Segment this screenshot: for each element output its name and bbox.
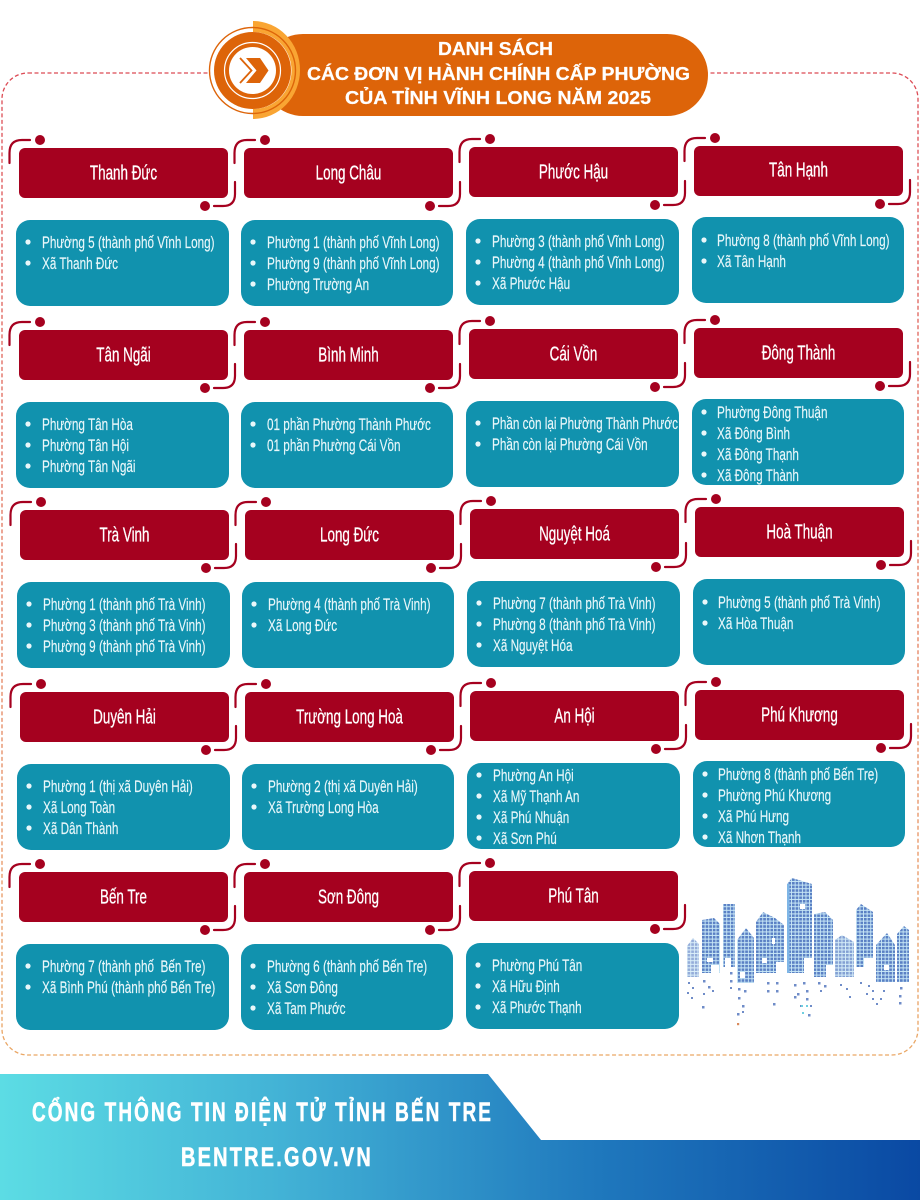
list: Phường 1 (thị xã Duyên Hải) (43, 778, 193, 797)
list (242, 582, 454, 668)
list: Phường 9 (thành phố Vĩnh Long) (267, 255, 440, 274)
list (466, 219, 679, 305)
header: Trà Vinh (100, 523, 149, 546)
footer text (32, 1095, 493, 1172)
title pill (262, 34, 708, 116)
list: Phường Phú Tân (492, 957, 582, 976)
list (241, 944, 453, 1030)
list: Xã Tam Phước (267, 1000, 346, 1019)
list: Xã Phú Nhuận (493, 809, 569, 828)
list (692, 399, 904, 486)
card: Sơn Đông (234, 859, 460, 1030)
header (695, 690, 904, 740)
list: Xã Hữu Định (492, 978, 560, 997)
title banner (210, 21, 708, 119)
list: Phần còn lại Phường Thành Phước (492, 415, 678, 434)
header: Phú Tân (548, 884, 599, 907)
card: Phước Hậu (460, 134, 685, 305)
header: Bến Tre (100, 885, 147, 908)
card: Tân Ngãi (10, 317, 235, 488)
card: Bình Minh (234, 317, 460, 488)
list: Phường Tân Hòa (42, 416, 134, 435)
list: Xã Mỹ Thạnh An (493, 788, 579, 807)
list (16, 220, 229, 306)
list (17, 582, 230, 668)
list: Xã Phú Hưng (718, 808, 789, 827)
list: Phường Tân Hội (42, 437, 129, 456)
list (466, 401, 679, 487)
list: Xã Sơn Phú (493, 830, 557, 849)
list (692, 217, 904, 303)
list: Xã Hòa Thuận (718, 615, 793, 634)
card: Phú Khương (686, 677, 911, 848)
list: Phường 5 (thành phố Trà Vinh) (718, 594, 881, 613)
list: Xã Long Đức (268, 617, 337, 636)
header (19, 330, 228, 380)
title text (307, 38, 690, 108)
card: Nguyệt Hoá (460, 496, 686, 667)
card: Long Đức (236, 497, 461, 668)
list (241, 220, 453, 306)
list: Phường Đông Thuận (717, 404, 827, 423)
header (244, 330, 453, 380)
header (244, 148, 453, 198)
list: Xã Nguyệt Hóa (493, 637, 573, 656)
footer text: BENTRE.GOV.VN (181, 1142, 373, 1172)
list: Xã Thanh Đức (42, 255, 118, 274)
list: Phường Tân Ngãi (42, 458, 136, 477)
header (469, 147, 678, 197)
list (467, 763, 680, 849)
header: Hoà Thuận (766, 520, 833, 543)
list: 01 phần Phường Thành Phước (267, 416, 431, 435)
list: Phường 7 (thành phố Trà Vinh) (493, 595, 656, 614)
list: Phường 3 (thành phố Vĩnh Long) (492, 233, 665, 252)
header: Phước Hậu (539, 160, 608, 183)
header (20, 510, 229, 560)
icon: chevron badge (210, 21, 300, 119)
header (695, 507, 904, 557)
header: Long Đức (320, 523, 379, 546)
header (244, 872, 453, 922)
list: Xã Đông Thành (717, 467, 799, 486)
list: Xã Tân Hạnh (717, 253, 786, 272)
header (19, 148, 228, 198)
card: Duyên Hải (10, 679, 236, 850)
list: Phường 8 (thành phố Vĩnh Long) (717, 232, 890, 251)
list: Phường Phú Khương (718, 787, 831, 806)
card: Phú Tân (460, 858, 685, 1029)
list (693, 579, 905, 665)
illustration: pixel city skyline (687, 878, 909, 1025)
list: Phường 8 (thành phố Trà Vinh) (493, 616, 656, 635)
header: Long Châu (316, 161, 381, 184)
list: Phường 3 (thành phố Trà Vinh) (43, 617, 206, 636)
header (20, 692, 229, 742)
list: Xã Đông Bình (717, 425, 790, 444)
card: An Hội (460, 678, 686, 849)
card: Đông Thành (684, 315, 910, 486)
list: Phường 8 (thành phố Bến Tre) (718, 766, 878, 785)
list (242, 764, 454, 850)
header: Đông Thành (762, 341, 835, 364)
header: Tân Hạnh (769, 158, 828, 181)
list: Phường 5 (thành phố Vĩnh Long) (42, 234, 215, 253)
header: Trường Long Hoà (296, 705, 403, 728)
list: Phường 1 (thành phố Trà Vinh) (43, 596, 206, 615)
card: Thanh Đức (10, 135, 235, 306)
title text: CÁC ĐƠN VỊ HÀNH CHÍNH CẤP PHƯỜNG (307, 63, 690, 84)
list: Phần còn lại Phường Cái Vồn (492, 436, 648, 455)
card: Tân Hạnh (684, 133, 910, 303)
title text: DANH SÁCH (438, 38, 553, 59)
card: Hoà Thuận (686, 494, 911, 665)
list: Phường 6 (thành phố Bến Tre) (267, 958, 427, 977)
list: Xã Đông Thạnh (717, 446, 799, 465)
header (19, 872, 228, 922)
header: An Hội (554, 704, 595, 727)
list: Xã Nhơn Thạnh (718, 829, 801, 848)
list: Phường Trường An (267, 276, 369, 295)
header (469, 871, 678, 921)
list: Xã Bình Phú (thành phố Bến Tre) (42, 979, 215, 998)
header: Nguyệt Hoá (539, 522, 610, 545)
list: Xã Phước Hậu (492, 275, 570, 294)
list: Xã Sơn Đông (267, 979, 338, 998)
header: Sơn Đông (318, 885, 379, 908)
list: Phường 9 (thành phố Trà Vinh) (43, 638, 206, 657)
card: Trà Vinh (10, 497, 236, 668)
list (17, 764, 230, 850)
title text: CỦA TỈNH VĨNH LONG NĂM 2025 (345, 87, 651, 108)
list (467, 581, 680, 667)
footer banner (0, 1074, 920, 1200)
header (694, 146, 903, 196)
header (470, 691, 679, 741)
list (16, 944, 229, 1030)
card: Long Châu (234, 135, 460, 306)
header: Cái Vồn (550, 342, 597, 365)
list: Phường 2 (thị xã Duyên Hải) (268, 778, 418, 797)
list: Phường 7 (thành phố Bến Tre) (42, 958, 205, 977)
card: Bến Tre (10, 859, 235, 1030)
list: Xã Dân Thành (43, 820, 118, 839)
list (241, 402, 453, 488)
list (466, 943, 679, 1029)
list: Phường 4 (thành phố Vĩnh Long) (492, 254, 665, 273)
header: Phú Khương (761, 703, 838, 726)
list: 01 phần Phường Cái Vồn (267, 437, 401, 456)
footer background (0, 1074, 920, 1200)
list: Xã Phước Thạnh (492, 999, 582, 1018)
footer text: CỔNG THÔNG TIN ĐIỆN TỬ TỈNH BẾN TRE (32, 1095, 493, 1127)
header (470, 509, 679, 559)
header (245, 510, 454, 560)
list: Phường An Hội (493, 767, 574, 786)
list: Phường 4 (thành phố Trà Vinh) (268, 596, 431, 615)
header: Duyên Hải (93, 705, 156, 728)
header: Thanh Đức (90, 161, 157, 184)
list (693, 761, 905, 848)
header: Tân Ngãi (96, 343, 151, 366)
header: Bình Minh (318, 343, 379, 366)
list: Xã Long Toàn (43, 799, 115, 818)
list (16, 402, 229, 488)
header (245, 692, 454, 742)
header (469, 329, 678, 379)
card: Cái Vồn (460, 316, 685, 487)
list: Xã Trường Long Hòa (268, 799, 379, 818)
header (694, 328, 903, 378)
card: Trường Long Hoà (236, 679, 461, 850)
list: Phường 1 (thành phố Vĩnh Long) (267, 234, 440, 253)
